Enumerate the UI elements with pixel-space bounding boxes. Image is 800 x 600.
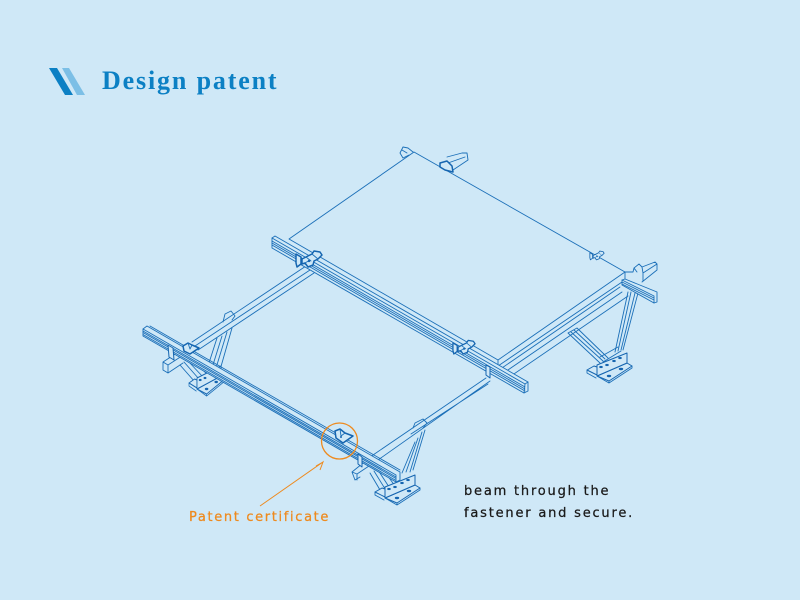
clamp: left rail xyxy=(183,343,199,354)
clamp: upper beam right xyxy=(453,340,475,354)
foot: right xyxy=(587,353,632,383)
clamp: panel right edge xyxy=(590,251,604,260)
rail: right cross rail under panel xyxy=(373,287,628,460)
upper beam xyxy=(272,236,528,393)
foot: left xyxy=(189,366,225,396)
callout arrow xyxy=(260,462,323,506)
clamp: patented fastener xyxy=(335,429,353,443)
lower beam xyxy=(143,326,400,482)
clamp: upper beam left xyxy=(296,251,322,267)
icon: double slash xyxy=(49,68,85,95)
rear beam xyxy=(622,279,657,303)
solar panel xyxy=(289,152,625,366)
description text xyxy=(464,484,634,521)
brackets on beams xyxy=(168,345,490,467)
rail: left cross rail xyxy=(163,266,378,480)
description text: beam through the xyxy=(464,484,610,499)
rear rail ends xyxy=(400,147,657,282)
title: Design patent xyxy=(102,66,278,95)
callout circle xyxy=(322,423,358,459)
strut: left foot xyxy=(180,311,235,382)
label: patent certificate: Patent certificate xyxy=(189,510,330,525)
technical drawing: mounting frame xyxy=(143,147,657,505)
foot: middle xyxy=(375,475,420,505)
strut: right foot xyxy=(568,292,638,363)
strut: middle foot xyxy=(370,419,427,495)
description text: fastener and secure. xyxy=(464,506,634,521)
clamp: panel top edge xyxy=(440,153,468,172)
